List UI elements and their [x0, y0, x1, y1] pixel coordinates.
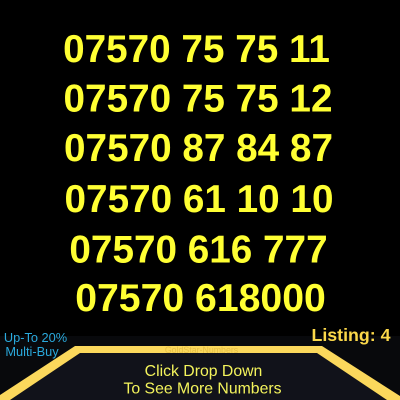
call to action [123, 363, 282, 398]
number row 5: 07570 616 777 [69, 228, 328, 272]
multi-buy line 2: Multi-Buy [5, 344, 59, 359]
number row 2: 07570 75 75 12 [64, 78, 332, 120]
footer panel [0, 336, 400, 400]
call to action line 1: Click Drop Down [145, 363, 262, 380]
call to action line 2: To See More Numbers [123, 380, 282, 398]
number row 6: 07570 618000 [75, 277, 326, 320]
number row 4: 07570 61 10 10 [65, 178, 333, 221]
number row 1: 07570 75 75 11 [63, 28, 330, 71]
multi-buy note [4, 330, 67, 359]
multi-buy line 1: Up-To 20% [4, 330, 67, 345]
number row 3: 07570 87 84 87 [64, 127, 333, 170]
phone number list [63, 28, 333, 320]
listing count: Listing: 4 [311, 325, 391, 345]
brand label: GoldStar-Numbers [165, 345, 239, 355]
